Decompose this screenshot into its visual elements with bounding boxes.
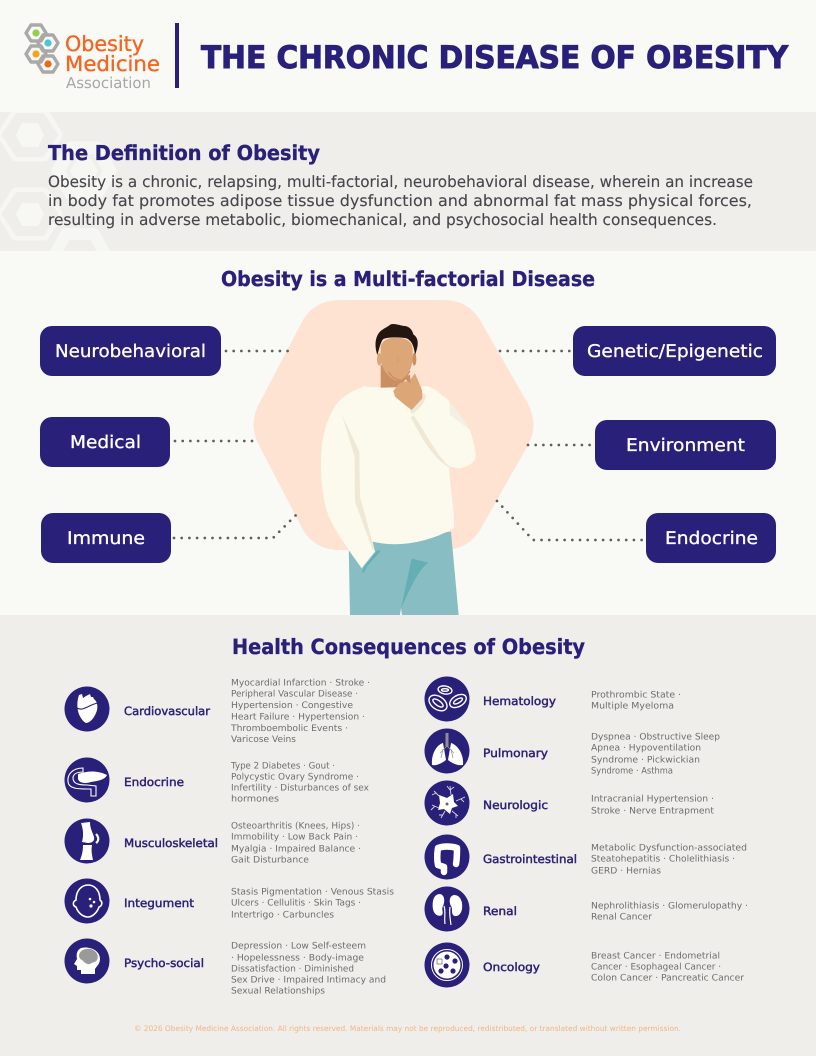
- definition heading: The Definition of Obesity: [48, 141, 320, 165]
- row: Cardiovascular: [64, 678, 370, 745]
- header logo: Medicine: [65, 52, 160, 76]
- title: THE CHRONIC DISEASE OF OBESITY: [201, 40, 789, 76]
- dotted connectors: [174, 351, 642, 540]
- panel: definition: [0, 112, 816, 251]
- hair: [376, 324, 418, 355]
- row: Cardiovascular: Hypertension · Congestive: [231, 701, 353, 711]
- row: Psycho-social: Depression · Low Self-esteem: [231, 942, 366, 952]
- face: [381, 338, 413, 381]
- factor: Genetic/Epigenetic: Genetic/Epigenetic: [587, 342, 763, 362]
- row: Cardiovascular: Heart Failure · Hypertension ·: [231, 712, 365, 722]
- row: Pulmonary: Syndrome · Asthma: [591, 766, 673, 776]
- footer copyright: © 2026 Obesity Medicine Association. All rights reserved. Materials may not be reproduced, redistributed, or translated without written permission.: [134, 1024, 681, 1033]
- row: Renal: Renal: [483, 904, 517, 918]
- row: Psycho-social: [64, 938, 386, 996]
- definition body: [48, 173, 753, 229]
- sweater: [321, 386, 476, 568]
- row: Pulmonary: Apnea · Hypoventilation: [591, 744, 701, 754]
- row: Hematology: Multiple Myeloma: [591, 702, 674, 712]
- row: Integument: [64, 878, 394, 924]
- row: Cardiovascular: Myocardial Infarction · Stroke ·: [231, 678, 370, 688]
- row: Psycho-social: Sex Drive · Impaired Intimacy and: [231, 976, 386, 986]
- hand: [393, 373, 422, 410]
- factor: Immune: Immune: [67, 529, 145, 549]
- row: Gastrointestinal: Steatohepatitis · Cholelithiasis ·: [591, 854, 735, 864]
- factor: Neurobehavioral: [40, 326, 221, 376]
- row: Cardiovascular: Peripheral Vascular Disease ·: [231, 690, 358, 700]
- header divider: [175, 23, 179, 88]
- header logo: Obesity: [65, 32, 144, 56]
- row: Musculoskeletal: [64, 818, 361, 866]
- row: Cardiovascular: Varicose Veins: [231, 735, 296, 745]
- header logo: [26, 25, 160, 92]
- factor: Endocrine: [646, 513, 776, 563]
- row: Psycho-social: Psycho-social: [124, 956, 204, 970]
- panel: health consequences: [0, 615, 816, 1056]
- factor: Environment: Environment: [626, 436, 745, 456]
- row: Hematology: [424, 676, 681, 722]
- trousers: [349, 532, 459, 615]
- row: Endocrine: [64, 758, 370, 804]
- row: Endocrine: Infertility · Disturbances of sex: [231, 784, 370, 794]
- row: Psycho-social: · Hopelessness · Body-image: [231, 954, 364, 964]
- row: Endocrine: Type 2 Diabetes · Gout ·: [230, 762, 335, 772]
- row: Endocrine: Endocrine: [124, 775, 184, 789]
- row: Oncology: [424, 942, 744, 988]
- factor: Genetic/Epigenetic: [573, 326, 776, 376]
- multi-factorial heading: Obesity is a Multi-factorial Disease: [221, 267, 595, 291]
- row: Neurologic: Neurologic: [483, 798, 548, 812]
- row: Integument: Ulcers · Cellulitis · Skin Tags ·: [231, 898, 361, 908]
- row: Renal: Nephrolithiasis · Glomerulopathy ·: [591, 902, 748, 912]
- row: Psycho-social: Dissatisfaction · Diminished: [231, 964, 354, 974]
- row: Psycho-social: Sexual Relationships: [231, 986, 325, 996]
- row: Integument: Integument: [124, 896, 195, 910]
- factor: Medical: [40, 417, 170, 467]
- row: Gastrointestinal: Metabolic Dysfunction-associated: [591, 844, 747, 854]
- row: Pulmonary: [424, 728, 720, 776]
- background hexagon pattern: [16, 123, 44, 226]
- row: Musculoskeletal: Immobility · Low Back Pain ·: [231, 832, 358, 842]
- row: Pulmonary: Syndrome · Pickwickian: [591, 756, 700, 766]
- factor: Medical: Medical: [70, 433, 141, 453]
- row: Hematology: Hematology: [483, 694, 556, 708]
- row: Musculoskeletal: Gait Disturbance: [231, 856, 309, 866]
- row: Endocrine: Polycystic Ovary Syndrome ·: [231, 772, 359, 782]
- row: Oncology: Breast Cancer · Endometrial: [591, 952, 720, 962]
- definition body: Obesity is a chronic, relapsing, multi-factorial, neurobehavioral disease, wherein an increase: [48, 173, 753, 191]
- row: Neurologic: [424, 780, 714, 826]
- row: Renal: Renal Cancer: [591, 912, 652, 922]
- row: Integument: Stasis Pigmentation · Venous Stasis: [231, 888, 394, 898]
- hexagon backdrop: [254, 300, 534, 550]
- row: Oncology: Oncology: [483, 960, 540, 974]
- health consequences heading: Health Consequences of Obesity: [232, 635, 585, 659]
- row: Renal: [424, 886, 748, 932]
- row: Gastrointestinal: [424, 834, 747, 880]
- row: Pulmonary: Dyspnea · Obstructive Sleep: [591, 732, 720, 742]
- row: Integument: Intertrigo · Carbuncles: [231, 910, 334, 920]
- definition body: resulting in adverse metabolic, biomechanical, and psychosocial health consequences.: [48, 211, 717, 229]
- row: Musculoskeletal: Osteoarthritis (Knees, Hips) ·: [231, 822, 360, 832]
- row: Hematology: Prothrombic State ·: [591, 690, 681, 700]
- row: Gastrointestinal: Gastrointestinal: [483, 852, 577, 866]
- factor: Environment: [595, 420, 776, 470]
- row: Gastrointestinal: GERD · Hernias: [591, 866, 661, 876]
- row: Oncology: Colon Cancer · Pancreatic Cancer: [591, 974, 744, 984]
- sweater folds: [342, 415, 375, 552]
- definition body: in body fat promotes adipose tissue dysfunction and abnormal fat mass physical forces,: [48, 192, 752, 210]
- figure: thinking man: [321, 324, 476, 615]
- neck: [381, 365, 411, 388]
- row: Endocrine: hormones: [231, 794, 279, 804]
- factor: Immune: [41, 513, 171, 563]
- row: Musculoskeletal: Musculoskeletal: [124, 836, 218, 850]
- header logo: Association: [66, 74, 151, 92]
- row: Neurologic: Intracranial Hypertension ·: [591, 794, 714, 804]
- row: Oncology: Cancer · Esophageal Cancer ·: [591, 962, 721, 972]
- row: Cardiovascular: Cardiovascular: [124, 704, 210, 718]
- row: Cardiovascular: Thromboembolic Events ·: [230, 724, 348, 734]
- row: Neurologic: Stroke · Nerve Entrapment: [591, 806, 714, 816]
- row: Pulmonary: Pulmonary: [483, 746, 548, 760]
- row: Musculoskeletal: Myalgia · Impaired Balance ·: [231, 844, 361, 854]
- factor: Neurobehavioral: Neurobehavioral: [55, 342, 206, 362]
- factor: Endocrine: Endocrine: [665, 529, 758, 549]
